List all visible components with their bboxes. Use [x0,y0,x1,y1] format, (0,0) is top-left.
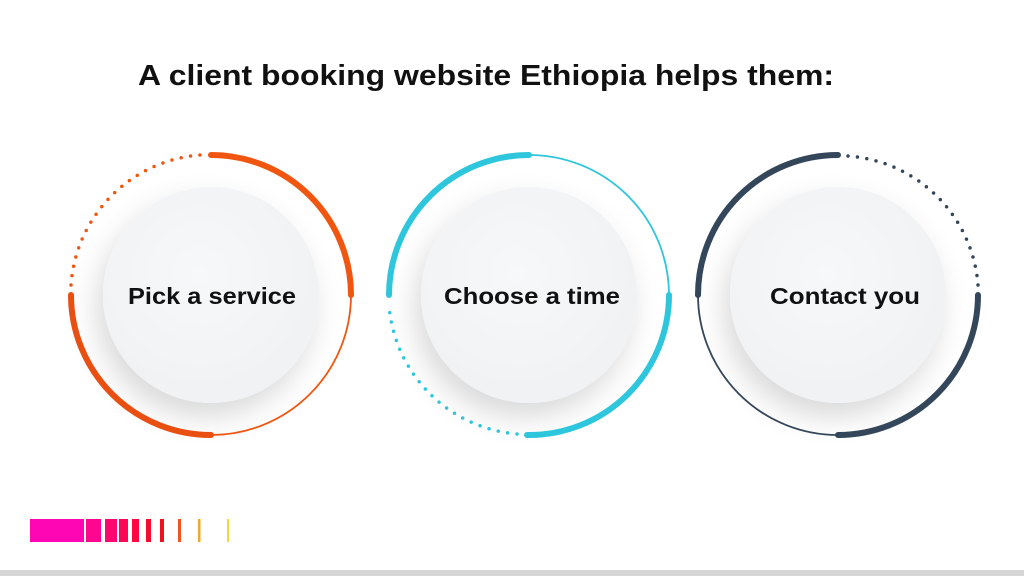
circle 2: Choose a time: Choose a time [444,283,620,309]
circle 1: Pick a service: Pick a service [128,283,296,309]
circle 3: Contact you: Contact you [770,283,920,309]
bottom strip [0,570,1024,576]
circle 1: Pick a service [71,155,351,435]
title: A client booking website Ethiopia helps them: [138,60,834,92]
circle 3: Contact you [698,155,978,435]
circle 2: Choose a time [389,155,669,435]
decorative gradient bars [30,519,229,542]
